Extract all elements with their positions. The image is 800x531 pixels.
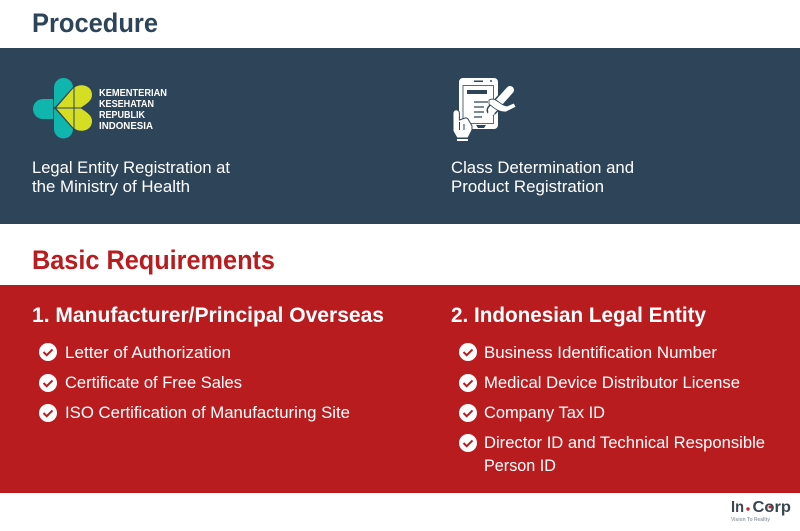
- text: legal entity registration: [32, 159, 230, 196]
- panel: requirements: [0, 285, 800, 493]
- text: class determination: Product Registration: [451, 178, 604, 196]
- item: director id: [459, 434, 765, 475]
- item: business identification number: Business Identification Number: [484, 344, 718, 362]
- item: distributor license: Medical Device Distributor License: [484, 374, 740, 392]
- text: class determination: Class Determination and: [451, 159, 634, 177]
- item: director id: Director ID and Technical Responsible: [484, 434, 765, 452]
- logo: Ministry of Health: KESEHATAN: [99, 99, 154, 110]
- item: letter of authorization: Letter of Authorization: [65, 344, 231, 362]
- logo: Ministry of Health: KEMENTERIAN: [99, 88, 167, 99]
- logo: InCorp: [731, 499, 791, 523]
- column heading 2: 2. Indonesian Legal Entity: [451, 303, 706, 327]
- item: certificate of free sales: Certificate of Free Sales: [65, 374, 242, 392]
- title: Procedure: Procedure: [32, 8, 158, 38]
- text: legal entity registration: the Ministry of Health: [32, 178, 190, 196]
- item: director id: Person ID: [484, 457, 556, 475]
- logo: Ministry of Health: INDONESIA: [99, 121, 153, 132]
- logo: InCorp: In: [731, 499, 744, 516]
- icon: tablet and pen in hand: [453, 78, 516, 141]
- column: manufacturer: [32, 303, 384, 422]
- text: legal entity registration: Legal Entity Registration at: [32, 159, 230, 177]
- logo: InCorp: Vision To Reality: [731, 517, 771, 523]
- panel: procedure: [0, 48, 800, 224]
- column: Indonesian legal entity: [451, 303, 765, 475]
- item: company tax id: Company Tax ID: [484, 404, 605, 422]
- item: ISO certification: ISO Certification of Manufacturing Site: [65, 404, 350, 422]
- text: class determination: [451, 159, 634, 196]
- logo: Ministry of Health: [33, 78, 167, 138]
- heading: Basic Requirements: Basic Requirements: [32, 245, 275, 275]
- logo: Ministry of Health: REPUBLIK: [99, 110, 146, 121]
- logo: InCorp: Corp: [752, 499, 791, 516]
- column heading 1: 1. Manufacturer/Principal Overseas: [32, 303, 384, 327]
